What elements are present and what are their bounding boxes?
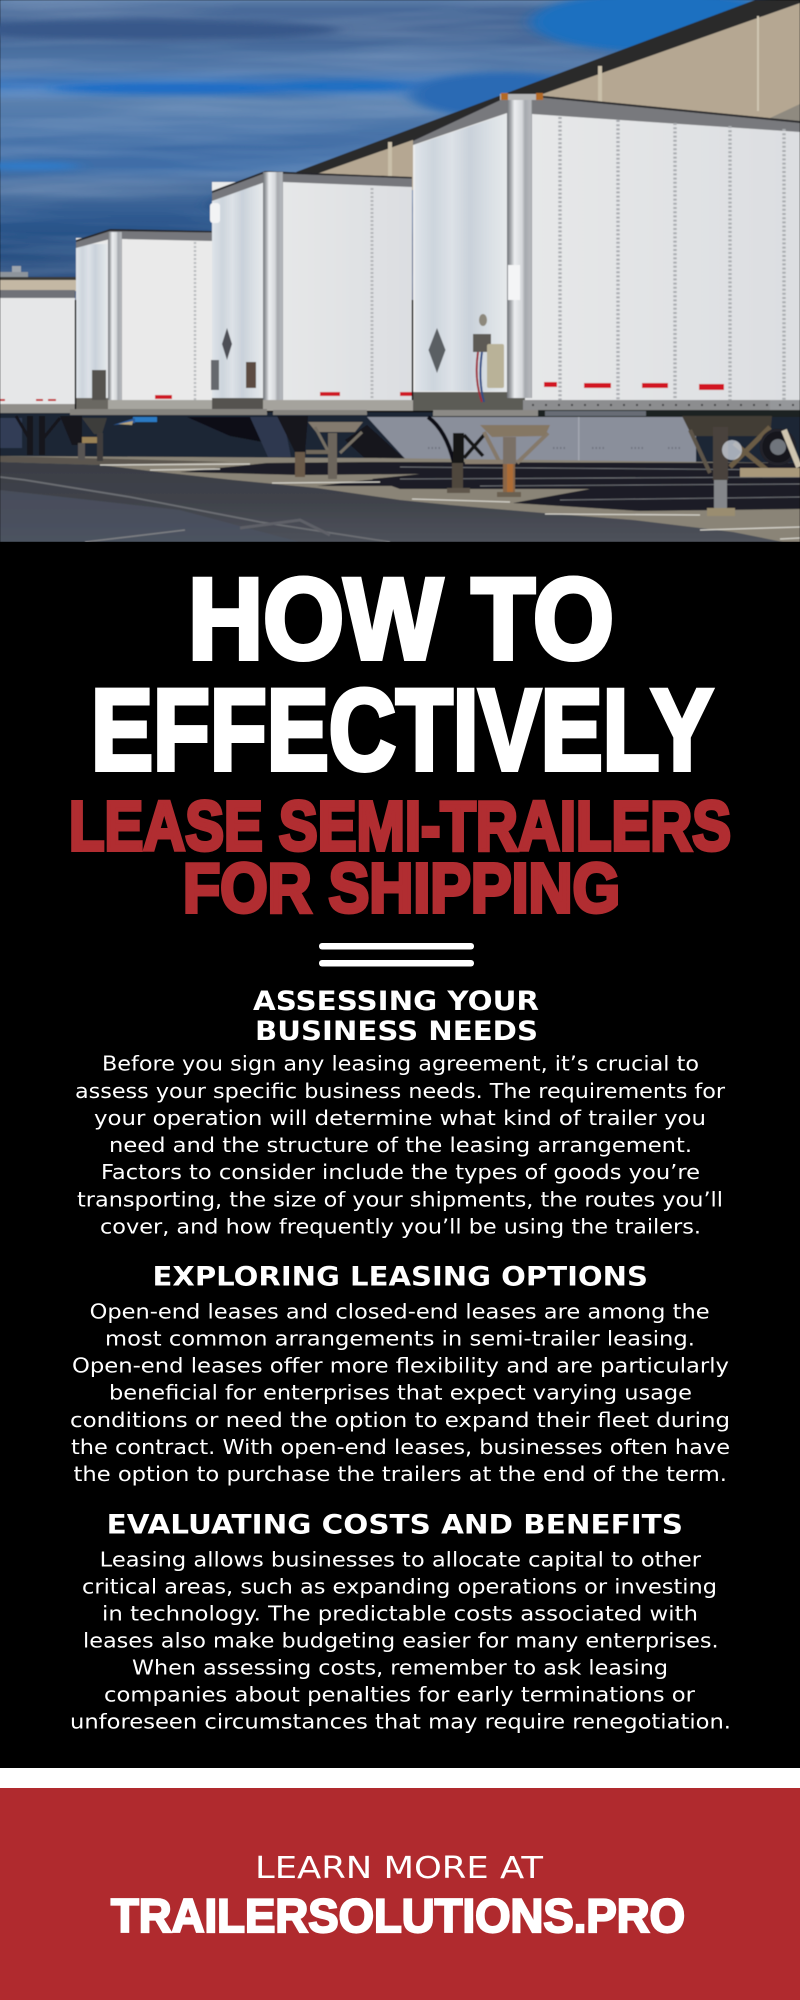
website url: TRAILERSOLUTIONS.PRO	[111, 1889, 685, 1942]
title	[69, 556, 731, 927]
body text	[70, 1300, 730, 1486]
footer call to action panel	[0, 1788, 800, 2000]
icon: placard diamond	[428, 328, 446, 373]
trailer 1	[0, 290, 75, 413]
body text: critical areas, such as expanding operations or investing	[82, 1575, 717, 1599]
body text: Factors to consider include the types of goods you’re	[101, 1160, 700, 1184]
body text: When assessing costs, remember to ask leasing	[132, 1656, 668, 1680]
double line divider	[319, 943, 474, 966]
heading: ASSESSING YOUR	[253, 986, 539, 1017]
body text: in technology. The predictable costs associated with	[102, 1602, 698, 1626]
heading: EVALUATING COSTS AND BENEFITS	[107, 1509, 683, 1540]
body text: the option to purchase the trailers at the end of the term.	[74, 1462, 727, 1486]
body text: transporting, the size of your shipments, the routes you’ll	[77, 1187, 723, 1211]
sky with clouds	[0, 0, 800, 300]
shadow on pavement	[180, 462, 800, 511]
body text: conditions or need the option to expand their fleet during	[70, 1408, 730, 1432]
body text: most common arrangements in semi-trailer leasing.	[105, 1327, 695, 1351]
body text: leases also make budgeting easier for many enterprises.	[83, 1629, 719, 1653]
shaded area under the trailers	[0, 412, 800, 466]
heading: BUSINESS NEEDS	[255, 1016, 538, 1047]
landing gear	[16, 416, 800, 516]
gear D	[428, 417, 550, 497]
body text: Open-end leases offer more flexibility and are particularly	[72, 1354, 729, 1378]
gear A	[16, 416, 60, 455]
trailer 3	[210, 171, 413, 411]
building roof and wall	[296, 0, 800, 190]
body text	[70, 1548, 731, 1734]
hero photo: semi-trailers at a loading dock	[0, 0, 800, 542]
distant building behind first trailer	[0, 266, 76, 291]
gear B	[60, 416, 107, 461]
trailer 2	[76, 229, 212, 410]
far trailer in shadow behind landing gear	[188, 416, 697, 462]
body text: the contract. With open-end leases, businesses often have	[71, 1435, 730, 1459]
title line: How to: HOW TO	[188, 556, 614, 684]
section: evaluating costs and benefits	[70, 1509, 731, 1734]
body text: Before you sign any leasing agreement, it’s crucial to	[102, 1052, 699, 1076]
body text: beneficial for enterprises that expect varying usage	[109, 1381, 692, 1405]
gear C	[277, 416, 363, 479]
body text: cover, and how frequently you’ll be using the trailers.	[100, 1214, 701, 1238]
icon: placard diamond	[222, 328, 232, 360]
body text: Open-end leases and closed-end leases are among the	[90, 1300, 710, 1324]
white separator strip	[0, 1768, 800, 1788]
subtitle line: For shipping: FOR SHIPPING	[183, 849, 620, 927]
heading	[253, 986, 539, 1047]
gear E	[682, 416, 800, 516]
body text: your operation will determine what kind of trailer you	[94, 1106, 706, 1130]
body text: unforeseen circumstances that may require renegotiation.	[70, 1710, 731, 1734]
pavement	[0, 456, 800, 542]
body text	[75, 1052, 726, 1238]
section: exploring leasing options	[70, 1262, 730, 1486]
body text: need and the structure of the leasing arrangement.	[109, 1133, 692, 1157]
icon: electrical connector and wiring	[473, 314, 504, 402]
learn more text: LEARN MORE AT	[255, 1851, 544, 1886]
asphalt	[0, 462, 783, 542]
heading: EXPLORING LEASING OPTIONS	[152, 1262, 648, 1293]
section: assessing your business needs	[75, 986, 726, 1238]
body text: assess your specific business needs. The requirements for	[75, 1079, 726, 1103]
body text: companies about penalties for early terminations or	[104, 1683, 696, 1707]
body text: Leasing allows businesses to allocate capital to other	[100, 1548, 702, 1572]
deck rails under trailers	[69, 408, 368, 416]
trailer 4	[413, 93, 800, 417]
